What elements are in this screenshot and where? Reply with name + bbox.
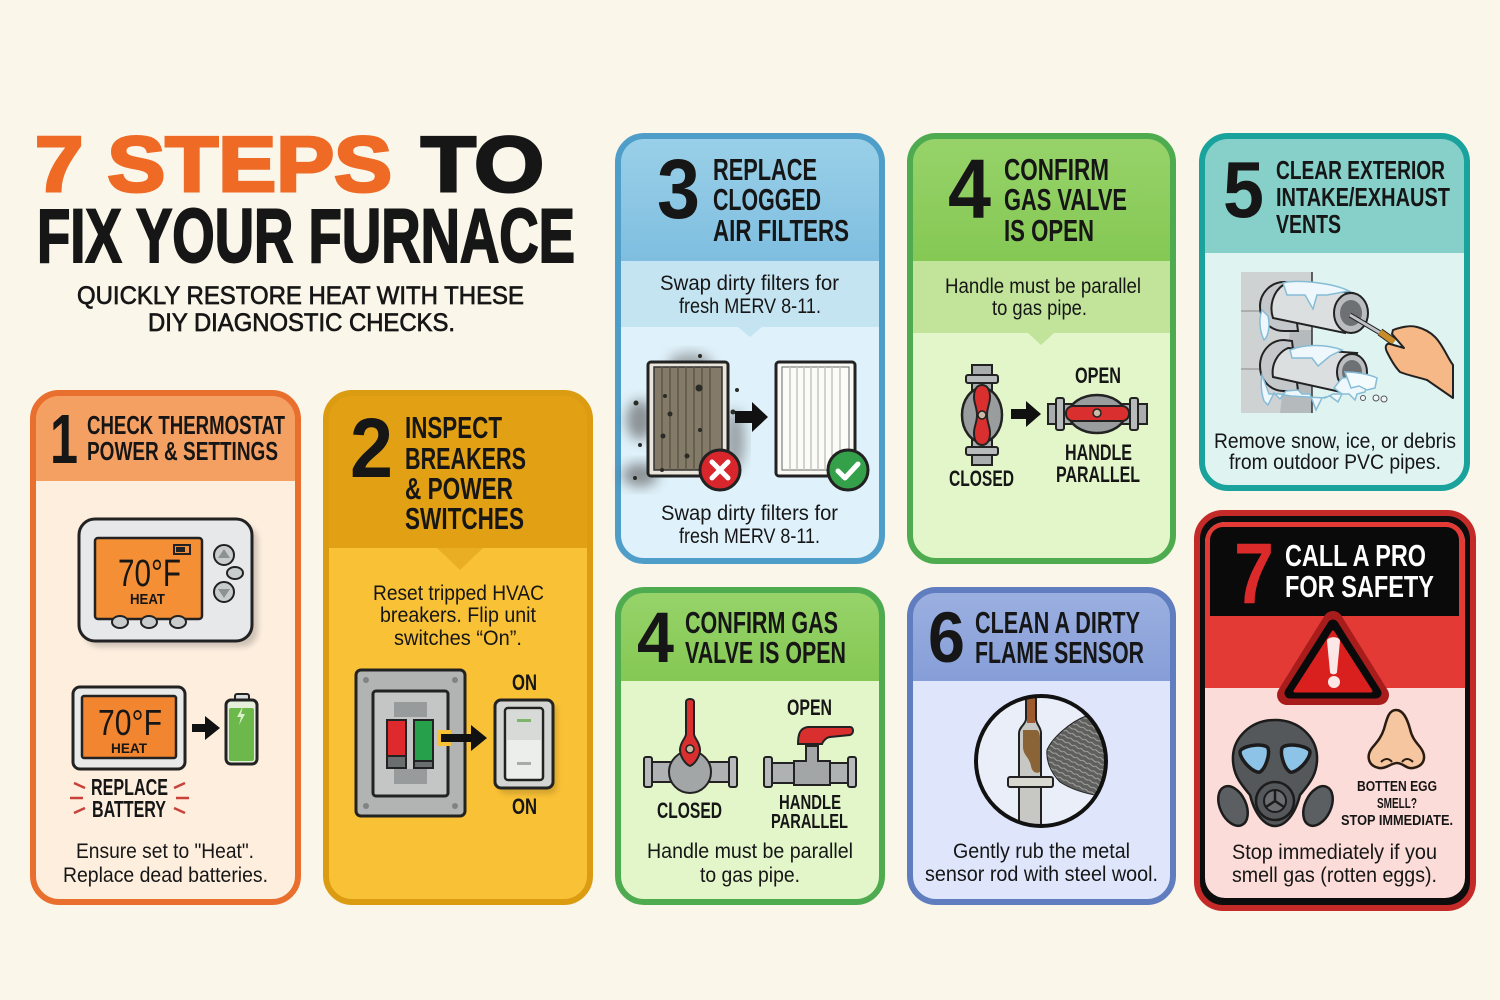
- icon: new battery: [226, 694, 257, 764]
- step 2 heading: & POWER: [405, 471, 513, 506]
- step 3 description top: fresh MERV 8-11.: [679, 295, 821, 318]
- subtitle: DIY DIAGNOSTIC CHECKS.: [148, 309, 455, 337]
- icon: open valve horizontal: OPEN: [1075, 363, 1121, 388]
- title: TO: [421, 120, 544, 208]
- icon: thermostat: HEAT: [130, 591, 165, 608]
- step 4 heading: IS OPEN: [1004, 213, 1094, 248]
- panel: step 3 air filters: [618, 136, 882, 561]
- step 7 description: Stop immediately if you: [1232, 841, 1437, 864]
- step 2 description: breakers. Flip unit: [380, 604, 536, 627]
- step 6 heading: 6: [928, 599, 965, 678]
- icon: open ball valve: [764, 695, 856, 833]
- step 5 heading: CLEAR EXTERIOR: [1276, 155, 1445, 185]
- panel: step 4 gas valve (short): [618, 590, 882, 902]
- icon: thermostat: 70°F: [118, 553, 181, 595]
- arrow: breaker to switch: [437, 725, 487, 751]
- step 2 heading: SWITCHES: [405, 501, 524, 536]
- step 5 description: [1214, 430, 1456, 474]
- step 4 short heading: CONFIRM GAS: [685, 605, 838, 640]
- step 2 heading: 2: [350, 401, 393, 495]
- panel: step 7 call a pro: [1197, 513, 1473, 908]
- step 2 description: switches “On”.: [394, 627, 522, 650]
- step 7 heading: FOR SAFETY: [1285, 569, 1434, 604]
- step 3 description bottom: Swap dirty filters for: [661, 502, 838, 525]
- step 3 heading: AIR FILTERS: [713, 213, 849, 248]
- title: FIX YOUR FURNACE: [37, 194, 575, 279]
- step 7 heading: [1234, 526, 1434, 622]
- title: 7 STEPS: [35, 120, 392, 208]
- step 3 description bottom: fresh MERV 8-11.: [679, 525, 820, 548]
- step 1 heading: POWER & SETTINGS: [87, 436, 278, 466]
- icon: rocker switch: ON: [512, 670, 537, 695]
- step 4 short description: Handle must be parallel: [647, 840, 853, 863]
- icon: snowy vent pipes and hand: [1241, 272, 1453, 413]
- warning label: SMELL?: [1377, 796, 1417, 812]
- replace battery label: REPLACE: [91, 774, 168, 800]
- step 3 description top: Swap dirty filters for: [660, 272, 839, 295]
- icon: gas mask: [1212, 720, 1339, 831]
- step 4 description: [945, 275, 1141, 320]
- panel: step 1 thermostat: [33, 393, 298, 902]
- title: [35, 120, 575, 279]
- step 2 heading: [350, 401, 526, 536]
- step 1 heading: CHECK THERMOSTAT: [87, 410, 285, 440]
- step 5 description: from outdoor PVC pipes.: [1229, 451, 1441, 474]
- step 7 heading: 7: [1234, 526, 1274, 622]
- arrow: closed to open valve: [1011, 401, 1041, 427]
- step 4 short heading: [637, 599, 846, 678]
- replace battery label: BATTERY: [92, 796, 166, 822]
- icon: open valve horizontal: PARALLEL: [1056, 462, 1140, 487]
- subtitle: QUICKLY RESTORE HEAT WITH THESE: [77, 282, 524, 310]
- step 4 short description: [647, 840, 853, 887]
- step 3 heading: 3: [657, 142, 700, 236]
- icon: thermostat: [79, 519, 258, 647]
- step 3 heading: REPLACE: [713, 152, 817, 187]
- step 1 description: Ensure set to "Heat".: [76, 840, 254, 863]
- icon: rocker switch: ON: [512, 794, 537, 819]
- step 3 description bottom: [661, 502, 838, 548]
- step 5 description: Remove snow, ice, or debris: [1214, 430, 1456, 453]
- step 1 description: [63, 840, 268, 887]
- icon: nose: [1369, 710, 1424, 768]
- screwdriver: [1350, 315, 1382, 334]
- step 2 heading: BREAKERS: [405, 441, 526, 476]
- icon: small thermostat display: [73, 687, 185, 769]
- step 1 description: Replace dead batteries.: [63, 864, 268, 887]
- icon: clean filter: [776, 362, 855, 476]
- step 4 short heading: VALVE IS OPEN: [685, 635, 846, 670]
- step 5 heading: INTAKE/EXHAUST: [1276, 182, 1450, 212]
- step 5 heading: [1223, 145, 1450, 239]
- icon: closed ball valve: [644, 699, 737, 823]
- icon: sensor rod and steel wool: [976, 695, 1115, 828]
- step 1 heading: [50, 400, 285, 478]
- panel: step 4 gas valve (tall): [910, 136, 1173, 561]
- icon: breaker panel: [356, 670, 465, 816]
- step 4 heading: CONFIRM: [1004, 152, 1109, 187]
- panel: step 6 flame sensor: [910, 590, 1173, 902]
- bottom pipe: [1260, 340, 1298, 391]
- icon: open ball valve: HANDLE: [779, 792, 841, 814]
- icon: rocker switch: [495, 670, 557, 819]
- icon: open ball valve: OPEN: [787, 695, 832, 720]
- arrow: dirty to clean filter: [735, 402, 768, 432]
- step 2 description: [373, 582, 544, 650]
- step 4 short description: to gas pipe.: [700, 864, 800, 887]
- icon: dirty filter: [622, 353, 745, 487]
- step 6 description: [925, 840, 1158, 886]
- step 4 description: to gas pipe.: [992, 297, 1087, 320]
- step 6 heading: FLAME SENSOR: [975, 635, 1144, 670]
- step 4 short heading: 4: [637, 599, 674, 678]
- step 5 heading: 5: [1223, 145, 1264, 234]
- step 4 heading: GAS VALVE: [1004, 182, 1127, 217]
- replace battery label: [70, 774, 189, 822]
- icon: open ball valve: PARALLEL: [771, 811, 848, 833]
- step 6 description: Gently rub the metal: [953, 840, 1130, 863]
- warning label: STOP IMMEDIATE.: [1341, 813, 1453, 829]
- step 2 heading: INSPECT: [405, 410, 502, 445]
- icon: red x badge: [700, 450, 740, 490]
- icon: green check badge: [828, 450, 868, 490]
- icon: small thermostat display: 70°F: [98, 702, 162, 743]
- warning label: BOTTEN EGG: [1357, 779, 1437, 795]
- step 4 heading: 4: [948, 142, 991, 236]
- subtitle: [77, 282, 524, 337]
- step 7 description: [1232, 841, 1437, 887]
- step 4 heading: [948, 142, 1127, 248]
- icon: open valve horizontal: [1048, 363, 1147, 487]
- step 3 description top: [660, 272, 839, 318]
- arrow: to new battery: [192, 716, 220, 740]
- hand: [1386, 326, 1453, 398]
- icon: closed ball valve: CLOSED: [657, 798, 722, 823]
- step 7 heading: CALL A PRO: [1285, 538, 1426, 573]
- step 7 description: smell gas (rotten eggs).: [1232, 864, 1437, 887]
- top pipe: [1260, 282, 1298, 331]
- panel: step 2 breakers: [326, 393, 590, 902]
- step 3 heading: [657, 142, 849, 248]
- step 5 heading: VENTS: [1276, 209, 1341, 239]
- step 2 description: Reset tripped HVAC: [373, 582, 544, 605]
- icon: closed valve vertical: [962, 365, 1002, 465]
- step 3 heading: CLOGGED: [713, 182, 821, 217]
- icon: warning triangle: [1287, 621, 1379, 695]
- step 6 description: sensor rod with steel wool.: [925, 863, 1158, 886]
- step 1 heading: 1: [50, 400, 78, 478]
- panel: step 5 vents: [1202, 136, 1467, 488]
- step 4 description: Handle must be parallel: [945, 275, 1141, 298]
- icon: small thermostat display: HEAT: [111, 740, 147, 756]
- step 6 heading: [928, 599, 1144, 678]
- warning label: [1341, 779, 1453, 829]
- icon: open valve horizontal: HANDLE: [1065, 440, 1132, 465]
- label: closed: CLOSED: [949, 466, 1014, 491]
- step 6 heading: CLEAN A DIRTY: [975, 605, 1140, 640]
